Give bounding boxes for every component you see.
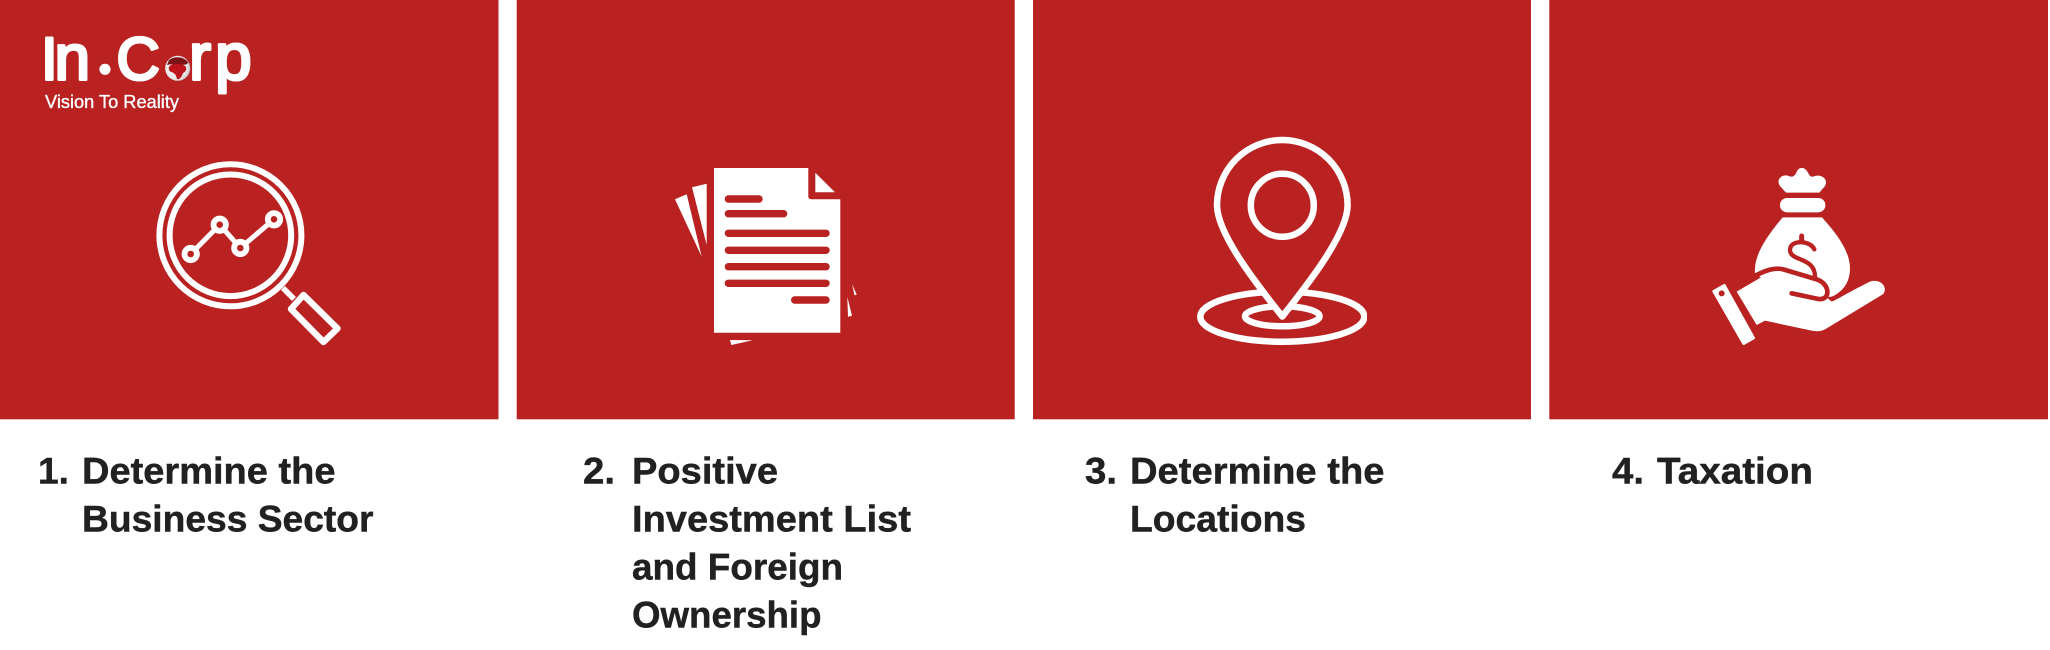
logo: InCorp Vision To Reality: C: [116, 26, 160, 92]
text: step 1 heading: Business Sector: [82, 499, 374, 540]
icon: location pin on target: [1200, 140, 1364, 342]
text: step 1 heading: Determine the: [82, 450, 336, 491]
panel: step 3 locations: [1033, 0, 1531, 419]
text: step 1 heading: [38, 450, 374, 540]
text: step 3 heading: Locations: [1130, 499, 1306, 540]
logo: InCorp Vision To Reality: p: [215, 20, 252, 94]
logo: InCorp Vision To Reality: r: [189, 20, 211, 94]
text: step 2 heading: and Foreign: [632, 546, 843, 588]
panel: step 2 positive investment list: [517, 0, 1015, 419]
text: step 2 heading: [583, 450, 911, 636]
text: step 2 heading: Ownership: [632, 595, 822, 636]
text: step 3 heading: 3.: [1085, 450, 1117, 491]
logo: InCorp Vision To Reality: Vision To Reality: [45, 92, 179, 112]
text: step 4 heading: Taxation: [1657, 450, 1813, 491]
panel: step 1 business sector: [0, 0, 498, 419]
text: step 2 heading: Positive: [632, 450, 778, 491]
icon: magnifier with line chart: [159, 164, 338, 342]
text: step 3 heading: [1085, 450, 1384, 540]
text: step 3 heading: Determine the: [1130, 450, 1384, 491]
panel: step 4 taxation: [1549, 0, 2048, 419]
text: step 4 heading: 4.: [1612, 450, 1644, 491]
logo: InCorp Vision To Reality: n: [54, 22, 90, 94]
text: step 2 heading: Investment List: [632, 499, 911, 540]
icon: hand holding money bag: [1714, 168, 1885, 344]
text: step 1 heading: 1.: [38, 450, 69, 491]
logo: InCorp Vision To Reality: [41, 20, 252, 112]
text: step 2 heading: 2.: [583, 450, 615, 491]
icon: document with loose pages: [675, 168, 857, 345]
logo: InCorp Vision To Reality: I: [41, 26, 58, 92]
